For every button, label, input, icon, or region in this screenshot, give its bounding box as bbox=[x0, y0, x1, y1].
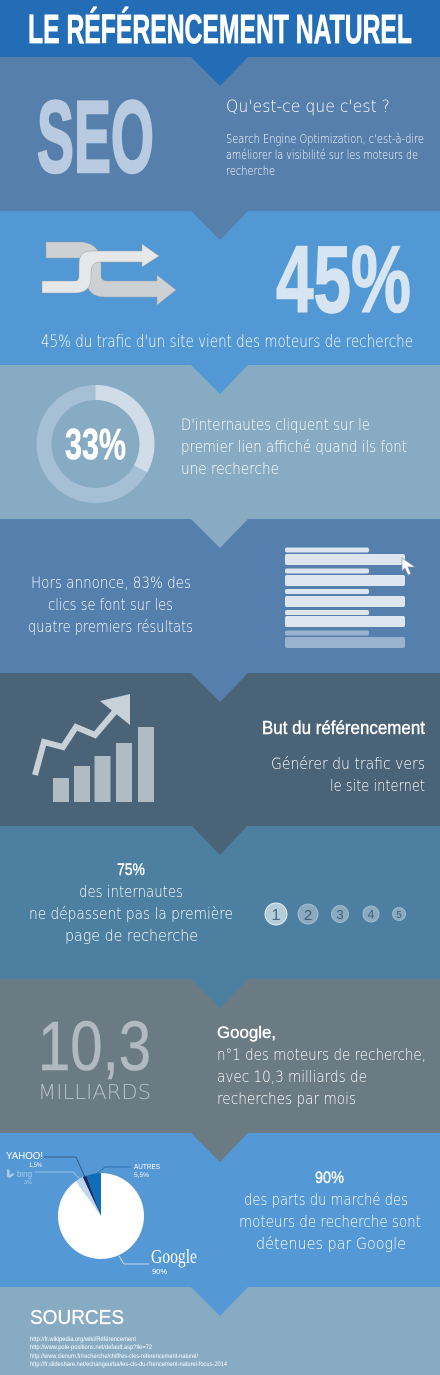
33% text: D'internautes cliquent sur le bbox=[181, 415, 370, 434]
numbered page circles: 3 bbox=[336, 907, 344, 922]
numbered page circles: 4 bbox=[368, 908, 375, 922]
market share text: des parts du marché des bbox=[244, 1190, 408, 1209]
big 10,3 figure: 10,3 bbox=[38, 1007, 151, 1085]
sources list: http://fr.slideshare.net/echangeurba/les-cls-du-rfrencement-naturel-focus-2014 bbox=[30, 1362, 228, 1368]
panel: 45% traffic bbox=[0, 211, 440, 365]
83% text bbox=[28, 573, 193, 636]
33% figure: 33% bbox=[65, 420, 126, 469]
label: Bing: bing bbox=[17, 1169, 32, 1179]
donut chart 33% bbox=[44, 392, 147, 496]
Google text bbox=[217, 1023, 426, 1108]
33% text bbox=[181, 415, 407, 478]
label: Autres bbox=[95, 1164, 160, 1179]
numbered page circles bbox=[265, 903, 406, 925]
75% text block: page de recherche bbox=[65, 926, 198, 945]
83% text: quatre premiers résultats bbox=[28, 617, 193, 636]
panel: goal of SEO bbox=[0, 673, 440, 826]
panel: 75% first page bbox=[0, 826, 440, 979]
icon: crossing arrows bbox=[42, 242, 176, 305]
Google text: avec 10,3 milliards de bbox=[217, 1067, 367, 1086]
83% text: clics se font sur les bbox=[48, 595, 173, 614]
numbered page circles: 1 bbox=[272, 907, 281, 924]
question heading: Qu'est-ce que c'est ? bbox=[226, 97, 390, 117]
panel: 10,3 billion bbox=[0, 979, 440, 1133]
33% text: une recherche bbox=[181, 459, 279, 478]
panel: sources bbox=[0, 1287, 440, 1375]
goal text bbox=[271, 754, 425, 795]
market share text bbox=[239, 1168, 421, 1253]
sources list bbox=[30, 1337, 228, 1368]
Google text: recherches par mois bbox=[217, 1089, 356, 1108]
label: Google: 90% bbox=[152, 1269, 167, 1276]
big SEO heading: SEO bbox=[37, 80, 154, 194]
Google text: Google, bbox=[217, 1023, 276, 1042]
goal heading: But du référencement bbox=[262, 718, 425, 738]
label: Autres: 5,5% bbox=[134, 1173, 150, 1179]
label: Autres: AUTRES bbox=[134, 1164, 160, 1171]
panel: header bbox=[0, 0, 440, 57]
75% text block: des internautes bbox=[79, 882, 183, 901]
75% text block: 75% bbox=[117, 860, 145, 879]
83% text: Hors annonce, 83% des bbox=[31, 573, 191, 592]
label: Yahoo: 1,5% bbox=[29, 1163, 43, 1169]
sources list: http://fr.wikipedia.org/wiki/Référencement bbox=[30, 1337, 136, 1343]
numbered page circles: 2 bbox=[304, 907, 312, 924]
market share text: détenues par Google bbox=[256, 1234, 406, 1253]
panel: 83% clicks bbox=[0, 519, 440, 673]
numbered page circles: 5 bbox=[396, 910, 402, 921]
milliards label: MILLIARDS bbox=[38, 1080, 151, 1104]
75% text block: ne dépassent pas la première bbox=[29, 904, 233, 923]
label: Google bbox=[119, 1246, 197, 1276]
label: Yahoo bbox=[6, 1151, 85, 1177]
panel: 33% first link bbox=[0, 365, 440, 519]
sources list: http://www.cienum.fr/recherche/chiffres-cles-referencement-naturel/ bbox=[30, 1354, 198, 1360]
icon: mouse cursor bbox=[402, 558, 415, 575]
pie chart bbox=[58, 1173, 144, 1259]
panel: what is SEO bbox=[0, 57, 440, 211]
sources list: http://www.pole-positions.net/default.asp?lle=72 bbox=[30, 1345, 153, 1351]
label: Google: Google bbox=[151, 1246, 197, 1268]
icon: growth chart with arrow bbox=[35, 694, 154, 802]
SEO definition text bbox=[226, 132, 424, 178]
label: Bing: 3% bbox=[24, 1180, 33, 1186]
75% text block bbox=[29, 860, 233, 945]
label: Bing bbox=[7, 1169, 82, 1186]
market share text: 90% bbox=[315, 1168, 344, 1187]
SEO definition text: recherche bbox=[226, 164, 275, 178]
label: Yahoo: YAHOO! bbox=[6, 1151, 43, 1162]
icon: search results list bbox=[285, 548, 415, 648]
panel: market share bbox=[0, 1133, 440, 1287]
sources heading: SOURCES bbox=[30, 1307, 124, 1329]
